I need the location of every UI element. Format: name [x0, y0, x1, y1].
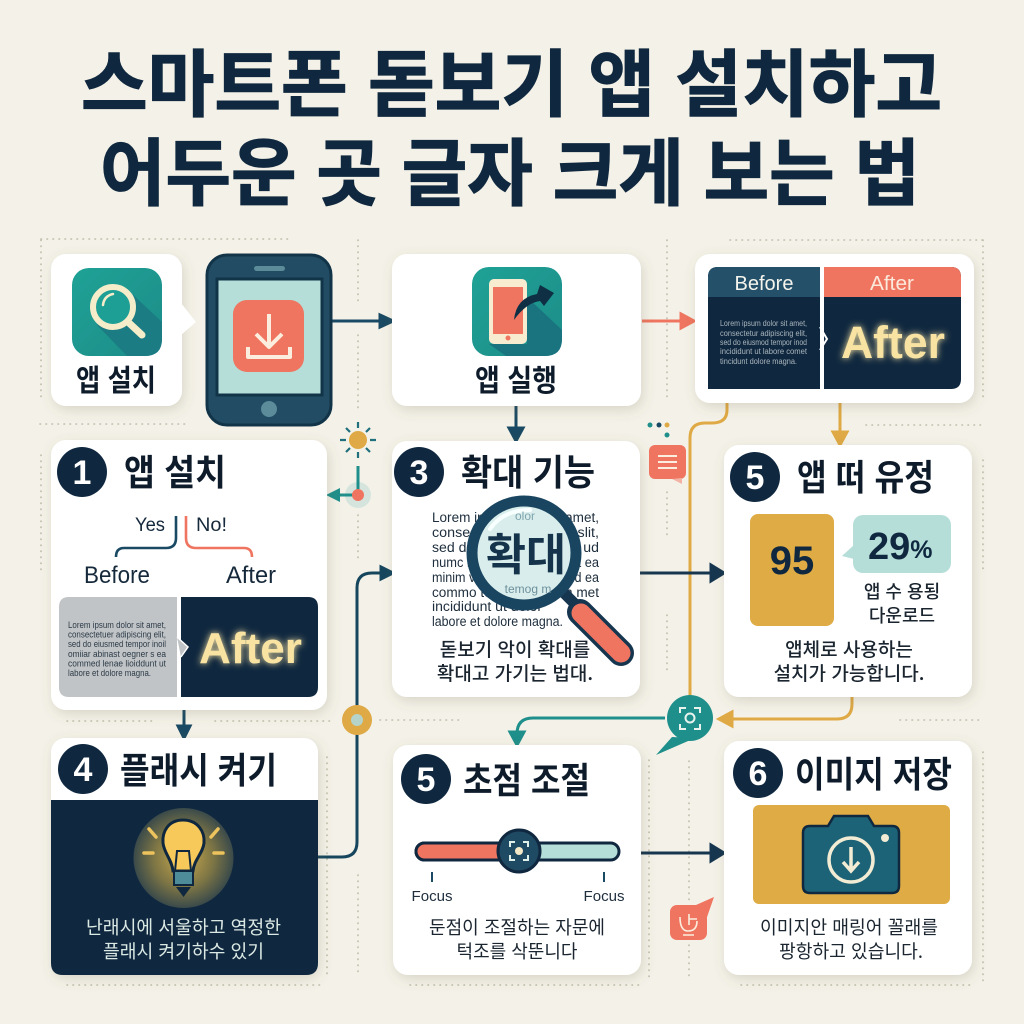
caption: 팡항하고 있습니다.	[779, 938, 923, 964]
caption: 턱조를 삭뚠니다	[456, 938, 578, 964]
stat label: 다운로드	[869, 602, 935, 628]
icon: phone launch	[472, 267, 562, 356]
before after sample	[59, 597, 318, 697]
heading: 초점 조절	[463, 752, 590, 804]
focus slider: Focus	[584, 888, 624, 905]
panel: before and after comparison: tincidunt dolore magna.	[720, 357, 797, 366]
panel: before and after comparison: After	[870, 273, 914, 295]
yes no branch: No!	[196, 515, 227, 536]
step badge 3: 3	[410, 454, 428, 492]
panel: step 5 focus control	[393, 745, 641, 975]
step badge 4	[58, 744, 108, 794]
caption	[774, 635, 924, 686]
panel: before and after comparison	[695, 254, 974, 403]
lorem text block: Lorem ipsum dolor sit amet,	[432, 510, 599, 525]
label: 앱 실행	[475, 356, 557, 400]
panel: before and after comparison: Before	[734, 273, 794, 295]
stat label: 앱 수 용됭	[864, 578, 940, 604]
connector arrows	[178, 314, 852, 861]
icon: coral speech bubble	[670, 897, 714, 940]
title: 어두운 곳 글자 크게 보는 법	[100, 115, 920, 221]
stat label	[864, 578, 940, 628]
before after sample: Lorem ipsum dolor sit amet,	[68, 620, 166, 631]
icon: magnifier: olor	[515, 509, 535, 523]
panel: before and after comparison: After	[841, 317, 945, 368]
step badge 4: 4	[74, 751, 93, 789]
heading: 앱 설치	[124, 444, 226, 496]
icon: magnifier: 확대	[486, 519, 566, 583]
panel: run app	[392, 254, 641, 406]
yes no branch: Before	[84, 562, 150, 589]
lorem text block: numc lorem dolore magna ea	[432, 555, 599, 570]
icon: magnifier: temog m	[505, 582, 551, 596]
stat block 95: 95	[770, 539, 814, 583]
before after sample: commed lenae lioiddunt ut	[68, 658, 166, 670]
lorem text block: consectetur adipiscing slit,	[432, 525, 599, 540]
focus slider	[412, 830, 624, 905]
lorem text block	[432, 510, 599, 629]
step badge 5	[730, 452, 780, 502]
caption	[429, 914, 605, 964]
before after sample: After	[199, 624, 302, 673]
panel: step 5 app stats	[724, 445, 972, 697]
icon: magnifier	[472, 501, 621, 653]
heading: 앱 떠 유정	[797, 449, 934, 501]
step badge 5: 5	[417, 761, 435, 799]
caption	[86, 914, 281, 964]
caption	[760, 914, 938, 964]
title	[81, 26, 942, 221]
caption	[437, 635, 593, 686]
icon: coral note bubble	[648, 422, 686, 484]
yes no branch: After	[226, 562, 276, 589]
label: 앱 설치	[76, 356, 156, 400]
step badge 5: 5	[746, 459, 764, 497]
caption: 앱체로 사용하는	[785, 635, 913, 662]
icon: teal focus bubble	[656, 695, 713, 755]
icon: phone with download	[207, 255, 331, 425]
step badge 5	[401, 754, 451, 804]
lorem text block: commo temoe mollit an met	[432, 585, 599, 600]
caption: 확대고 가기는 법대.	[437, 659, 593, 686]
stat block 95	[750, 514, 834, 626]
stat bubble 29%	[842, 515, 951, 573]
title: 스마트폰 돋보기 앱 설치하고	[81, 26, 942, 132]
icon: magnifier app	[72, 268, 162, 356]
panel: step 6 save image	[724, 741, 972, 975]
panel: step 4 flash on	[51, 738, 318, 975]
stat bubble 29%: %	[910, 536, 933, 564]
before after sample: labore et dolore magna.	[68, 668, 151, 679]
panel: step 3 zoom function	[392, 441, 640, 697]
lorem text block: labore et dolore magna.	[432, 614, 563, 629]
step badge 6: 6	[749, 755, 767, 793]
panel: install app icon card	[51, 254, 196, 406]
lorem text block: incididunt ut dolor	[432, 599, 543, 614]
focus slider: Focus	[412, 888, 452, 905]
caption: 난래시에 서울하고 역정한	[86, 914, 281, 940]
panel: before and after comparison: consectetur adipiscing elit,	[720, 329, 807, 338]
icon: camera on gold panel	[753, 805, 950, 904]
step badge 3	[394, 447, 444, 497]
lorem text block: minim veniam quis nostrud ea	[432, 570, 599, 585]
caption: 돋보기 악이 확대를	[440, 635, 590, 662]
before after sample: omiiar abinast oegner s ea	[68, 649, 167, 660]
yes no branch: Yes	[135, 515, 165, 536]
caption: 이미지안 매링어 꼴래를	[760, 914, 938, 940]
step badge 1	[57, 447, 107, 497]
before after sample: consectetuer adipiscing elit,	[68, 630, 166, 640]
step badge 1: 1	[73, 454, 91, 492]
caption: 플래시 켜기하수 있기	[103, 938, 264, 964]
heading: 확대 기능	[461, 444, 595, 496]
panel: before and after comparison: Lorem ipsum dolor sit amet,	[720, 319, 807, 328]
panel: before and after comparison: incididunt ut labore comet	[720, 347, 808, 356]
caption: 둔점이 조절하는 자문에	[429, 914, 605, 940]
icon: lightbulb and dot connector	[326, 422, 376, 508]
heading: 이미지 저장	[795, 746, 952, 798]
yes no branch	[84, 515, 276, 589]
icon: lightbulb	[134, 808, 234, 908]
panel: step 1 install app	[51, 440, 327, 710]
lorem text block: sed do eiusmod tempor ud	[432, 540, 599, 555]
before after sample: sed do eiusmed tempor inoil	[68, 639, 166, 650]
heading: 플래시 켜기	[120, 742, 277, 794]
panel: before and after comparison: sed do eiusmod tempor inod	[720, 338, 807, 347]
caption: 설치가 가능합니다.	[774, 659, 924, 686]
step badge 6	[733, 748, 783, 798]
gold junction node	[342, 705, 372, 735]
stat bubble 29%: 29	[868, 526, 910, 568]
